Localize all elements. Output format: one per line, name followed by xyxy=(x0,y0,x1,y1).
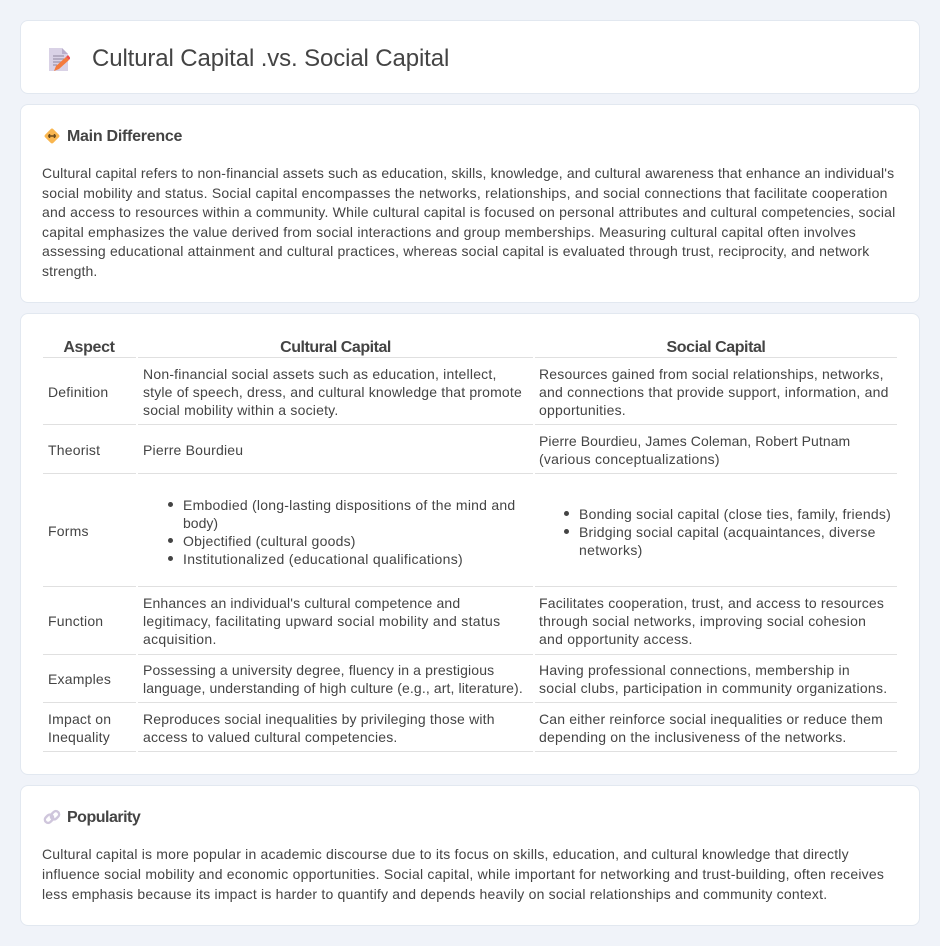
label: forms: Forms xyxy=(48,523,89,539)
list: cultural forms: Objectified (cultural goods) xyxy=(183,533,356,549)
text block: main difference paragraph: and access to resources within a community. While cultural capital is focused on personal attributes and cultural competencies, social xyxy=(42,204,896,220)
list: social forms: networks) xyxy=(579,542,643,558)
icon: chain link xyxy=(44,810,60,824)
cell: social definition: and connections that provide support, information, and xyxy=(539,384,889,400)
list: cultural forms xyxy=(168,497,515,567)
title: Cultural Capital .vs. Social Capital xyxy=(92,45,449,72)
cell: cultural definition: style of speech, dress, and cultural knowledge that promote xyxy=(143,384,522,400)
cell: social definition: opportunities. xyxy=(539,402,626,418)
cell: cultural examples: language, understanding of high culture (e.g., art, literature). xyxy=(143,680,523,696)
cell: cultural function: acquisition. xyxy=(143,631,217,647)
text block: main difference paragraph xyxy=(42,165,896,279)
label: definition: Definition xyxy=(48,384,108,400)
row: examples xyxy=(48,662,887,696)
text block: popularity paragraph xyxy=(42,846,884,902)
cell: cultural impact xyxy=(143,711,495,745)
label: impact on inequality: Inequality xyxy=(48,729,110,745)
cell: social impact: depending on the inclusiveness of the networks. xyxy=(539,729,846,745)
table header: social capital: Social Capital xyxy=(667,339,765,356)
list: social forms: Bonding social capital (close ties, family, friends) xyxy=(579,506,891,522)
table header: aspect: Aspect xyxy=(63,339,115,356)
cell: cultural function xyxy=(143,595,500,647)
text block: popularity paragraph: Cultural capital is more popular in academic discourse due to its focus on skills, education, and cultural knowledge that directly xyxy=(42,846,849,862)
row: forms xyxy=(48,497,891,567)
list: cultural forms: Embodied (long-lasting dispositions of the mind and xyxy=(183,497,515,513)
cell: social function: and opportunity access. xyxy=(539,631,693,647)
cell: social examples xyxy=(539,662,887,696)
cell: social function xyxy=(539,595,884,647)
cell: social function: through social networks, improving social cohesion xyxy=(539,613,866,629)
panel: popularity xyxy=(20,785,920,926)
panel: main difference xyxy=(20,104,920,303)
cell: cultural examples: Possessing a university degree, fluency in a prestigious xyxy=(143,662,494,678)
row: theorist xyxy=(48,433,850,467)
cell: cultural examples xyxy=(143,662,523,696)
cell: cultural definition: Non-financial social assets such as education, intellect, xyxy=(143,366,497,382)
cell: cultural theorist: Pierre Bourdieu xyxy=(143,442,243,458)
table header: cultural capital: Cultural Capital xyxy=(280,339,391,356)
cell: social impact xyxy=(539,711,883,745)
label: theorist: Theorist xyxy=(48,442,100,458)
cell: cultural function: legitimacy, facilitating upward social mobility and status xyxy=(143,613,500,629)
text block: popularity paragraph: influence social mobility and economic opportunities. Social capital, while important for networking and trust-building, often receives xyxy=(42,866,884,882)
cell: social theorist: Pierre Bourdieu, James Coleman, Robert Putnam xyxy=(539,433,850,449)
icon: warning diamond xyxy=(44,128,60,144)
cell: cultural impact: access to valued cultural competencies. xyxy=(143,729,397,745)
cell: social function: Facilitates cooperation, trust, and access to resources xyxy=(539,595,884,611)
list: social forms: Bridging social capital (acquaintances, diverse xyxy=(579,524,876,540)
text block: main difference paragraph: capital emphasizes the value derived from social interactions and group memberships. Measuring cultural capital often involves xyxy=(42,224,856,240)
text block: main difference paragraph: Cultural capital refers to non-financial assets such as education, skills, knowledge, and cultural awareness that enhance an individual's xyxy=(42,165,894,181)
label: impact on inequality xyxy=(48,711,111,745)
panel: title header xyxy=(20,20,920,94)
cell: cultural function: Enhances an individual's cultural competence and xyxy=(143,595,460,611)
panel: comparison table xyxy=(20,313,920,775)
cell: social theorist xyxy=(539,433,850,467)
list: cultural forms: Institutionalized (educational qualifications) xyxy=(183,551,463,567)
cell: social definition xyxy=(539,366,889,418)
cell: social examples: Having professional connections, membership in xyxy=(539,662,850,678)
cell: cultural definition: social mobility within a society. xyxy=(143,402,338,418)
row: function xyxy=(48,595,884,647)
cell: cultural definition xyxy=(143,366,522,418)
cell: social theorist: (various conceptualizations) xyxy=(539,451,720,467)
row: definition xyxy=(48,366,889,418)
icon: document with pencil xyxy=(49,48,70,71)
heading: popularity: Popularity xyxy=(67,809,140,826)
label: function: Function xyxy=(48,613,103,629)
cell: cultural impact: Reproduces social inequalities by privileging those with xyxy=(143,711,495,727)
row: impact on inequality xyxy=(48,711,883,745)
text block: popularity paragraph: less emphasis because its impact is harder to quantify and depends heavily on social relationships and community context. xyxy=(42,886,827,902)
label: examples: Examples xyxy=(48,671,111,687)
cell: social examples: social clubs, participation in community organizations. xyxy=(539,680,887,696)
list: social forms xyxy=(564,506,891,558)
text block: main difference paragraph: strength. xyxy=(42,263,97,279)
list: cultural forms: body) xyxy=(183,515,218,531)
label: impact on inequality: Impact on xyxy=(48,711,111,727)
cell: social definition: Resources gained from social relationships, networks, xyxy=(539,366,884,382)
heading: main difference: Main Difference xyxy=(67,128,182,145)
text block: main difference paragraph: social mobility and status. Social capital encompasses the networks, relationships, and social connections that facilitate cooperation xyxy=(42,185,888,201)
cell: social impact: Can either reinforce social inequalities or reduce them xyxy=(539,711,883,727)
text block: main difference paragraph: assessing educational attainment and cultural practices, whereas social capital is evaluated through trust, reciprocity, and network xyxy=(42,243,869,259)
